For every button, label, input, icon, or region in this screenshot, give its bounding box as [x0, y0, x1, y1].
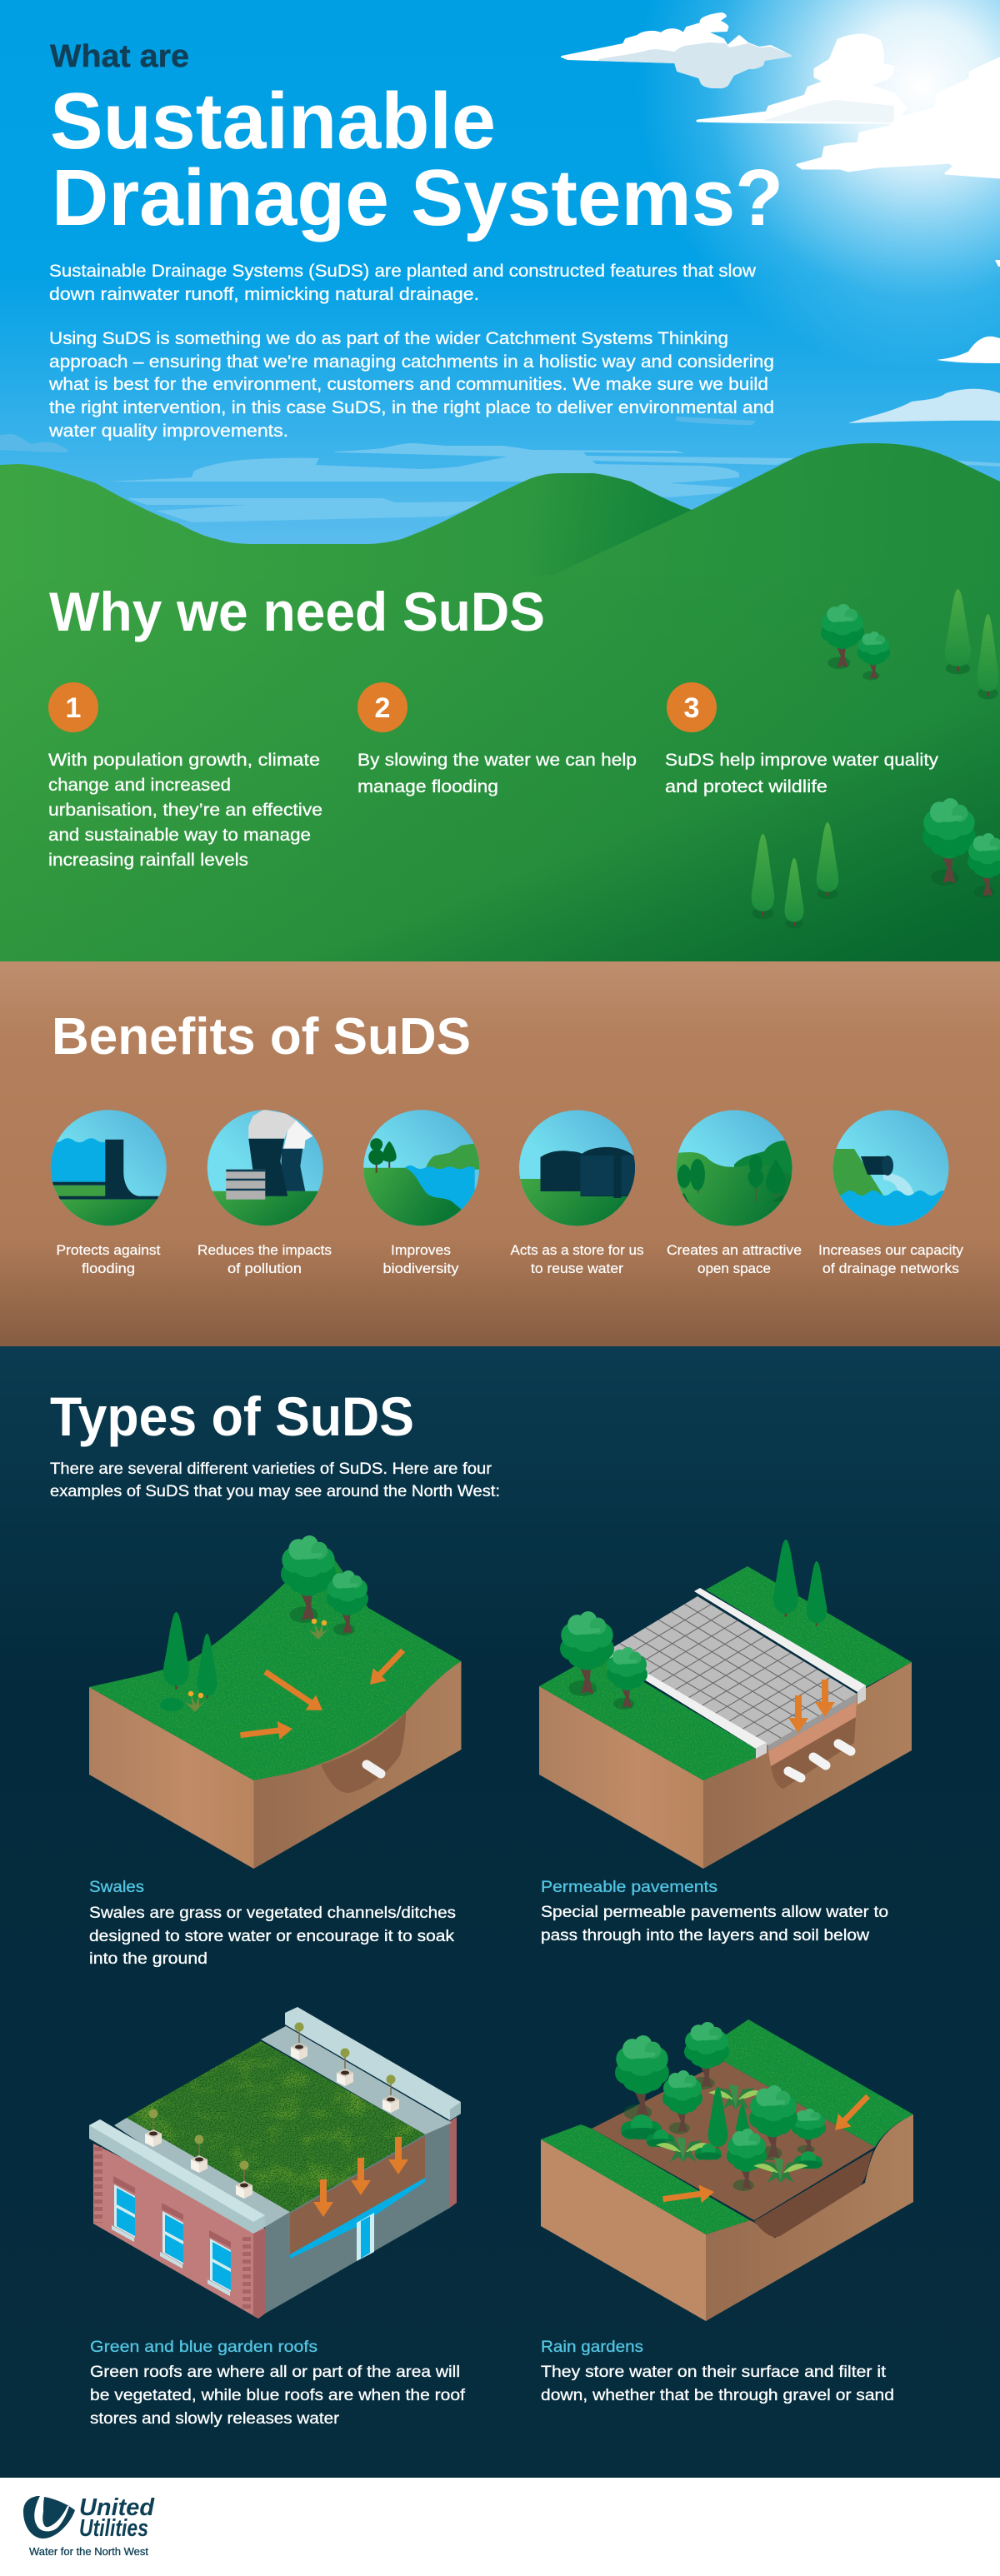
- parapets: [89, 2007, 461, 2234]
- benefit captions: Acts as a store for us: [510, 1242, 643, 1258]
- eyebrow: what are: What are: [50, 39, 189, 74]
- cloud: right middle: [937, 337, 1000, 363]
- benefit captions: flooding: [82, 1261, 135, 1276]
- benefit captions: Reduces the impacts: [198, 1242, 332, 1258]
- reason 2 text: [358, 751, 637, 796]
- reason 1 text: [48, 751, 322, 870]
- front grass: [539, 1650, 767, 1780]
- trench layers: [771, 1717, 856, 1789]
- reason 3 text: [665, 751, 939, 796]
- intro text: [50, 1460, 500, 1500]
- intro text: examples of SuDS that you may see around the North West:: [50, 1483, 500, 1500]
- windows: [112, 2176, 231, 2296]
- benefit captions: Increases our capacity: [818, 1242, 964, 1258]
- front brick wall: [93, 2144, 265, 2319]
- text: permeable pavements: pass through into the layers and soil below: [541, 1927, 869, 1944]
- back grass: [706, 1566, 912, 1687]
- badge 2: 2: [375, 692, 390, 724]
- intro paragraph 2: water quality improvements.: [48, 422, 288, 441]
- text: swales: Swales: [89, 1879, 144, 1896]
- text: green and blue roofs: Green roofs are where all or part of the area will: [90, 2364, 460, 2381]
- white pipe: [367, 1765, 381, 1774]
- badge 2: [358, 682, 408, 732]
- heading: Types of SuDS: [50, 1385, 414, 1447]
- icon: hills and trees: [676, 1110, 792, 1226]
- intro paragraph 2: Using SuDS is something we do as part of the wider Catchment Systems Thinking: [49, 329, 728, 348]
- benefit captions: open space: [698, 1261, 771, 1276]
- back grass: [723, 2019, 913, 2147]
- green roof: [127, 2041, 425, 2212]
- benefit captions: Creates an attractive: [667, 1242, 802, 1258]
- text: green and blue roofs: stores and slowly releases water: [90, 2410, 340, 2428]
- benefit captions: of pollution: [228, 1261, 302, 1276]
- cloud: right pale: [848, 389, 1000, 423]
- panel: hero text: [48, 39, 783, 441]
- logo wordmark: Utilities: [79, 2515, 148, 2542]
- icon: flood wall: [50, 1110, 167, 1226]
- reason 3 text: and protect wildlife: [665, 777, 828, 796]
- benefit: water store: [518, 1110, 638, 1226]
- reason 1 text: increasing rainfall levels: [48, 851, 248, 870]
- intro paragraph 1: down rainwater runoff, mimicking natural drainage.: [49, 285, 479, 304]
- grass surface: [89, 1558, 462, 1780]
- front grass: [541, 2124, 750, 2234]
- intro paragraph 1: [49, 262, 757, 304]
- main title: [50, 77, 783, 242]
- main title: Sustainable: [50, 77, 496, 166]
- benefit captions: Improves: [391, 1242, 451, 1258]
- badge 1: 1: [66, 692, 81, 724]
- benefit: pollution: [207, 1110, 323, 1226]
- kerbs: [607, 1588, 866, 1759]
- text: rain gardens: [541, 2339, 894, 2404]
- main title: Drainage Systems?: [52, 153, 783, 242]
- reason 2 text: manage flooding: [358, 777, 498, 796]
- text: rain gardens: down, whether that be through gravel or sand: [541, 2387, 894, 2404]
- text: rain gardens: They store water on their surface and filter it: [541, 2364, 887, 2381]
- reason 1 text: change and increased: [48, 776, 231, 795]
- icon: power station: [207, 1110, 323, 1226]
- benefit: flooding: [50, 1110, 167, 1226]
- panel: footer: [0, 2478, 1000, 2576]
- benefit: open space: [676, 1110, 792, 1226]
- diagram: rain gardens: [541, 2019, 913, 2321]
- middle hill shading: [500, 473, 692, 575]
- text: rain gardens: Rain gardens: [541, 2339, 643, 2356]
- reason 1: [48, 682, 322, 870]
- logo wordmark: [79, 2494, 155, 2542]
- intro paragraph 2: approach – ensuring that we're managing catchments in a holistic way and considering: [49, 352, 774, 372]
- heading: Why we need SuDS: [49, 581, 545, 642]
- badge 1: [48, 682, 98, 732]
- reason 1 text: urbanisation, they’re an effective: [48, 801, 322, 820]
- soil bed: [592, 2061, 875, 2220]
- text: green and blue roofs: be vegetated, while blue roofs are when the roof: [90, 2387, 466, 2404]
- icon: lake and trees: [363, 1110, 480, 1226]
- blue water layer: [290, 2178, 425, 2259]
- logo wordmark: United: [79, 2494, 155, 2521]
- icon: storage tanks: [518, 1110, 638, 1226]
- intro paragraph 2: what is best for the environment, customers and communities. We make sure we build: [48, 375, 768, 394]
- intro paragraph 2: the right intervention, in this case SuDS, in the right place to deliver environmental and: [49, 398, 774, 417]
- logo mark: [23, 2494, 75, 2539]
- text: swales: [89, 1879, 456, 1968]
- intro paragraph 1: Sustainable Drainage Systems (SuDS) are planted and constructed features that slow: [49, 262, 757, 281]
- panel: benefits of SuDS: [0, 961, 1000, 1346]
- text: green and blue roofs: [90, 2339, 466, 2428]
- down arrows: [788, 1680, 835, 1733]
- trees: lower right: [752, 798, 1000, 928]
- benefit captions: [57, 1242, 964, 1276]
- text: permeable pavements: Permeable pavements: [541, 1879, 718, 1896]
- reason 3 text: SuDS help improve water quality: [665, 751, 939, 770]
- pavers: [607, 1596, 857, 1751]
- cloud: sun bank: [798, 58, 1000, 177]
- low pale clouds: [0, 417, 1000, 522]
- benefit captions: biodiversity: [383, 1261, 459, 1276]
- cloud: upper right: [698, 35, 906, 122]
- flow arrows: [239, 1644, 410, 1745]
- trees: [560, 1540, 827, 1710]
- pipes: [788, 1744, 851, 1778]
- section wall: [265, 2119, 450, 2314]
- left and middle hills: [0, 464, 708, 575]
- right hill: [500, 443, 1000, 600]
- reason 2 text: By slowing the water we can help: [358, 751, 637, 770]
- soil section with arrows: [290, 2136, 425, 2255]
- icon: outfall pipe: [832, 1110, 949, 1226]
- panel: hero sky: [0, 0, 1000, 600]
- trees and plants: [160, 1535, 368, 1712]
- benefit captions: Protects against: [57, 1242, 161, 1258]
- diagram: permeable pavements: [539, 1540, 912, 1869]
- diagram: green and blue roofs: [89, 2007, 461, 2319]
- text: swales: into the ground: [89, 1950, 208, 1968]
- logo strapline: Water for the North West: [29, 2545, 148, 2558]
- text: permeable pavements: Special permeable pavements allow water to: [541, 1904, 888, 1921]
- text: permeable pavements: [541, 1879, 888, 1944]
- logo: United Utilities: [23, 2494, 155, 2558]
- benefit captions: to reuse water: [531, 1261, 623, 1276]
- reason 2: [358, 682, 637, 796]
- planting: [615, 2022, 826, 2191]
- badge 3: 3: [684, 692, 699, 724]
- heading: Benefits of SuDS: [52, 1008, 471, 1066]
- intro text: There are several different varieties of SuDS. Here are four: [50, 1460, 492, 1478]
- walkways: [114, 2118, 290, 2227]
- flow arrows: [662, 2089, 875, 2209]
- hills: [0, 443, 1000, 600]
- badge 3: [667, 682, 717, 732]
- trees: upper right: [821, 589, 998, 699]
- trench section: [754, 2150, 873, 2237]
- benefit: biodiversity: [363, 1110, 480, 1226]
- panel: why we need SuDS: [0, 575, 1000, 961]
- reason 3: [665, 682, 939, 796]
- planters: [145, 2023, 399, 2199]
- diagram: swales: [89, 1535, 462, 1869]
- down arrows: [313, 2137, 408, 2217]
- benefit captions: of drainage networks: [822, 1261, 959, 1276]
- panel: types of SuDS: [0, 1346, 1000, 2478]
- text: swales: Swales are grass or vegetated channels/ditches: [89, 1905, 456, 1922]
- reason 1 text: and sustainable way to manage: [48, 826, 311, 845]
- intro paragraph 2: [48, 329, 774, 441]
- text: green and blue roofs: Green and blue garden roofs: [90, 2339, 318, 2356]
- text: swales: designed to store water or encourage it to soak: [89, 1928, 455, 1945]
- cloud: top centre: [562, 13, 791, 87]
- reason 1 text: With population growth, climate: [48, 751, 320, 770]
- benefit: drainage: [832, 1110, 949, 1226]
